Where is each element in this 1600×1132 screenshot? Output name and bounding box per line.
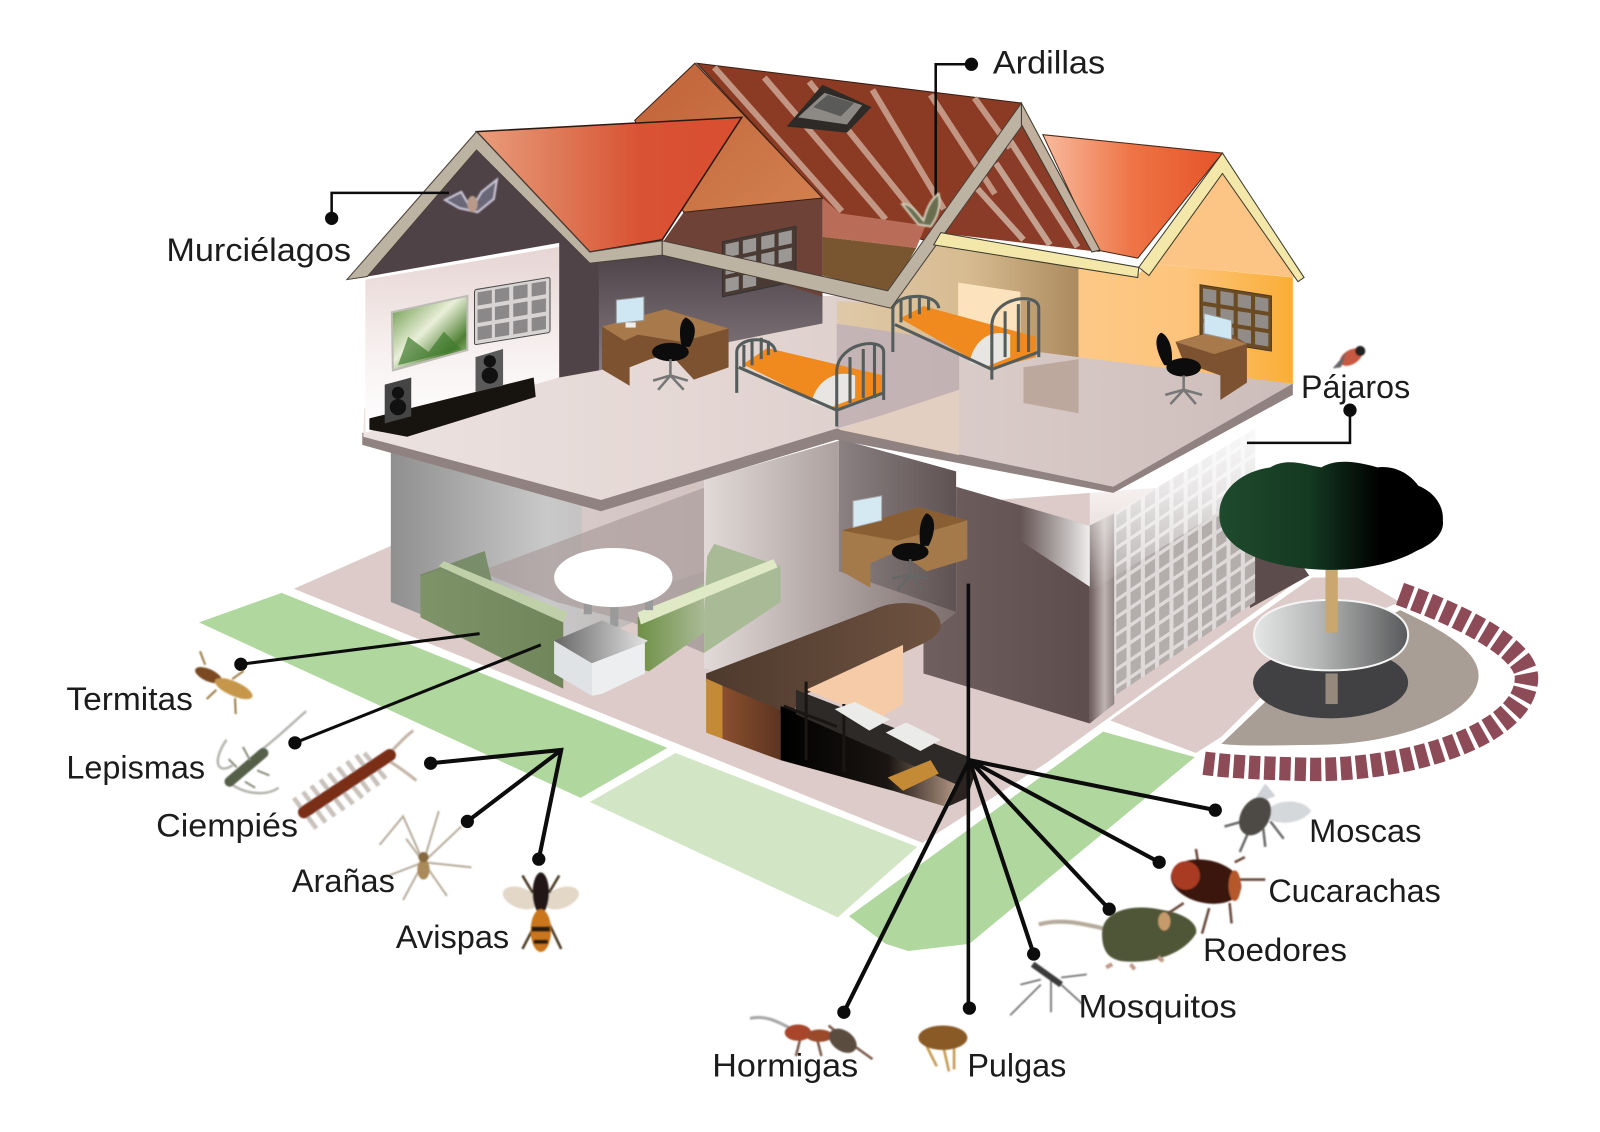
icon: mosquito [1010, 964, 1087, 1015]
callout dots [234, 58, 1357, 1019]
floor shadow band [480, 488, 704, 653]
left room pink wall [365, 247, 559, 433]
tree trunk [1325, 566, 1338, 633]
centre cube [554, 620, 648, 663]
label: Ardillas: Ardillas [993, 43, 1105, 80]
sofa left front [420, 569, 563, 689]
bed 2 [893, 295, 1039, 380]
upper floor slab [362, 296, 1293, 511]
icon: bird [1333, 345, 1365, 369]
garden: brick border [1204, 594, 1527, 769]
desk downstairs [842, 496, 967, 590]
label: Roedores: Roedores [1203, 931, 1347, 968]
callout lines [241, 64, 1350, 1012]
white fade below slab [1090, 408, 1255, 592]
slab edge [362, 383, 1293, 511]
yellow trim along right roof [934, 233, 1139, 278]
bed 1 [737, 338, 884, 427]
icon: bat [445, 180, 497, 212]
papers [835, 702, 890, 731]
lawn: green strip left [199, 593, 667, 798]
lines: wasps group [431, 750, 561, 859]
label: Arañas: Arañas [292, 862, 395, 899]
back wall [599, 250, 822, 370]
upper silver disc [1254, 600, 1408, 670]
lawn: green strip front right [849, 732, 1195, 951]
label: Moscas: Moscas [1309, 812, 1421, 849]
kitchen counter [706, 603, 974, 806]
icon: mouse [1039, 908, 1196, 969]
lower floor walls [391, 408, 1309, 723]
window: right room [1200, 285, 1271, 351]
large dark right wall [923, 487, 1090, 723]
translucent floor panel [837, 323, 959, 429]
floor surface [363, 296, 1293, 500]
dark column [839, 439, 956, 612]
brown panel under band [822, 237, 916, 293]
sofa right [704, 544, 781, 653]
desk upstairs right [1156, 313, 1247, 404]
drawer [888, 760, 939, 791]
garden path [1110, 578, 1400, 753]
icon: cockroach [1167, 849, 1265, 934]
copper roof side [635, 63, 822, 212]
right gable fill [1149, 173, 1295, 278]
lower disc [1253, 647, 1408, 718]
label: Hormigas: Hormigas [712, 1046, 858, 1083]
right gable trim [1139, 153, 1304, 282]
main rafter roof [697, 63, 1021, 243]
icon: fly [1224, 784, 1311, 852]
rear gable rafters [937, 103, 1100, 252]
wall strip before lattice [1090, 513, 1114, 723]
label: Murciélagos: Murciélagos [166, 231, 351, 268]
line: Termitas [241, 634, 480, 664]
label: Mosquitos: Mosquitos [1079, 987, 1237, 1024]
glass frame bars [784, 682, 844, 772]
tree [1219, 462, 1443, 718]
line: Pájaros [1247, 410, 1350, 443]
lower trunk [1325, 673, 1338, 704]
icon: centipede [294, 731, 416, 829]
hub block [949, 755, 974, 806]
lattice wall [1114, 429, 1255, 696]
speaker right [476, 349, 503, 392]
sofa left back [420, 551, 556, 673]
round table [554, 548, 672, 607]
rafters [714, 67, 1010, 227]
icon: spider [380, 811, 471, 900]
label: Avispas: Avispas [396, 918, 509, 955]
label: Ciempiés: Ciempiés [156, 807, 298, 844]
label: Cucarachas: Cucarachas [1268, 872, 1441, 909]
TV stand [369, 378, 536, 437]
lines: hub group [967, 584, 970, 1008]
line: Ardillas [936, 64, 971, 200]
speaker left [385, 378, 411, 423]
ground: pink base slab [294, 480, 1304, 843]
peach panel [806, 645, 903, 719]
label: Lepismas: Lepismas [66, 749, 205, 786]
icon: squirrel [902, 194, 940, 227]
label: Termitas: Termitas [66, 680, 193, 717]
window: back wall [722, 226, 796, 297]
icon: termite [183, 651, 261, 717]
rear wall beside tree [1250, 490, 1309, 608]
label: Pulgas: Pulgas [967, 1046, 1066, 1083]
upper floor walls [365, 198, 1293, 437]
mauve wall [704, 441, 956, 686]
brown arch [706, 603, 941, 714]
icon: ant [750, 1017, 872, 1059]
dark left gable [367, 150, 592, 277]
icon: wasp [500, 872, 582, 952]
right orange roof [1043, 135, 1222, 258]
line: Murciélagos [332, 193, 449, 218]
living room [420, 544, 781, 696]
trim of rear gable [1021, 103, 1100, 252]
icon: flea [918, 1025, 967, 1071]
desk upstairs left [602, 297, 729, 390]
left gable trim [347, 132, 662, 280]
orange right wall [1020, 255, 1293, 384]
tan alcove wall [837, 243, 1079, 357]
left red roof [477, 117, 742, 252]
label: Pájaros: Pájaros [1301, 368, 1410, 405]
brown face [722, 686, 781, 760]
gold end [706, 679, 722, 739]
table legs [584, 590, 653, 627]
tan floor panel [839, 390, 959, 455]
peach doorway [958, 283, 1020, 352]
pink band under rafters [822, 198, 926, 248]
pale pink middle wall [582, 474, 704, 612]
black counter front [781, 706, 959, 806]
tree canopy [1219, 462, 1443, 570]
rafters in rear gable [978, 141, 1078, 247]
garden: tan half disc [1221, 610, 1479, 746]
white fade on dark wall [1020, 505, 1090, 587]
long V trim [662, 103, 1021, 308]
icon: silverfish [218, 711, 306, 793]
skylight [787, 85, 871, 133]
brown upper wall [662, 198, 822, 297]
window: left room [475, 277, 550, 345]
line: Lepismas [295, 645, 541, 743]
TV screen [392, 296, 467, 370]
dark partition wall [559, 241, 599, 378]
translucent partition front [1023, 359, 1079, 413]
left gray wall [391, 452, 704, 663]
roof [347, 63, 1304, 308]
lawn: pale green strip [590, 753, 917, 917]
